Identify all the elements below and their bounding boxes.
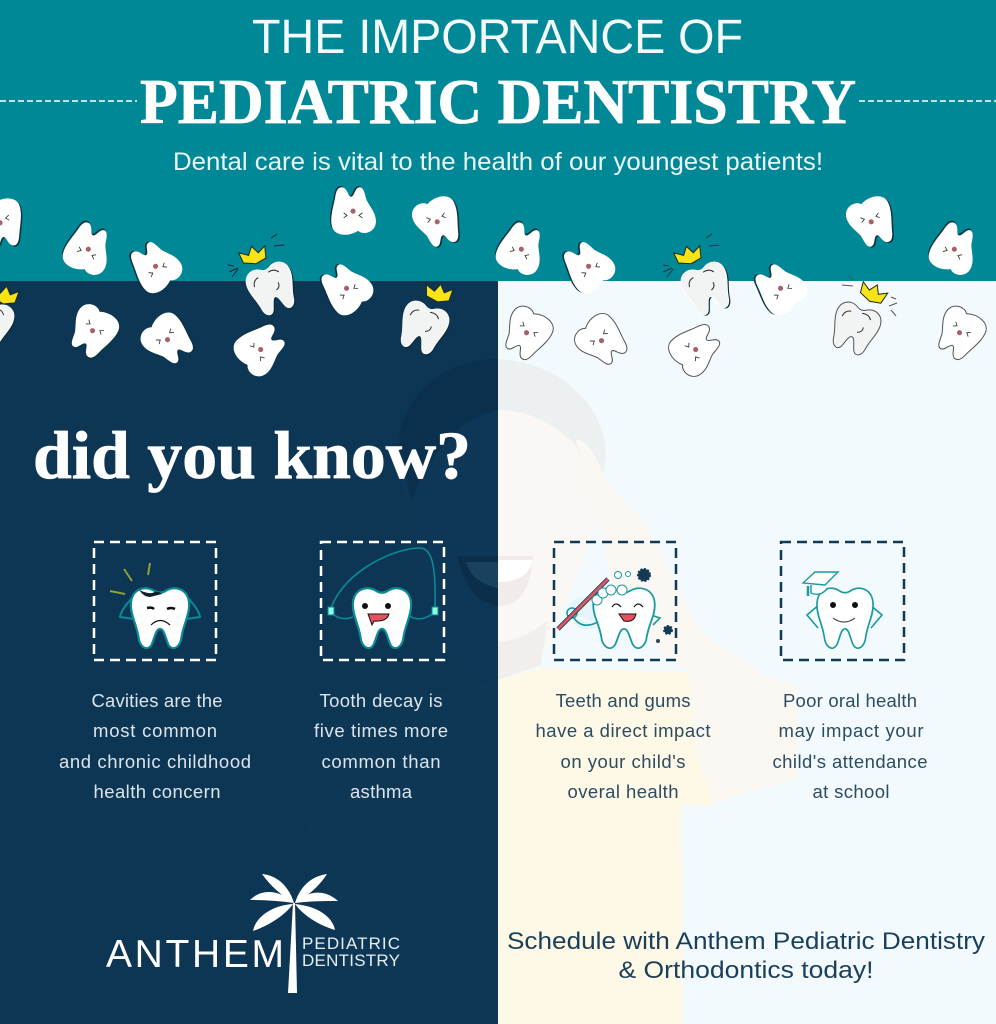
logo: Anthem Pediatric Dentistry: PEDIATRIC: [302, 934, 400, 953]
icon: graduate tooth: [803, 572, 882, 648]
logo: Anthem Pediatric Dentistry: DENTISTRY: [302, 951, 400, 970]
caption: at school: [812, 781, 890, 802]
call to action: [507, 928, 985, 984]
caption: Tooth decay is: [320, 690, 442, 711]
caption: asthma: [350, 781, 413, 802]
title line two: PEDIATRIC DENTISTRY: [140, 66, 856, 137]
caption: on your child's: [560, 751, 686, 772]
fact 2: tooth decay: [314, 542, 448, 802]
caption: and chronic childhood: [59, 751, 251, 772]
logo: Anthem Pediatric Dentistry: [106, 874, 400, 993]
caption: [59, 690, 251, 802]
call to action: & Orthodontics today!: [618, 957, 874, 984]
caption: Teeth and gums: [556, 690, 690, 711]
scattered teeth left: [0, 186, 466, 382]
caption: may impact your: [778, 720, 924, 741]
fact 1: cavities: [59, 542, 251, 802]
caption: five times more: [314, 720, 448, 741]
caption: overal health: [568, 781, 678, 802]
caption: [772, 690, 928, 802]
dashed frame: [781, 542, 904, 660]
caption: common than: [322, 751, 440, 772]
call to action: Schedule with Anthem Pediatric Dentistry: [507, 928, 985, 955]
logo: Anthem Pediatric Dentistry: ANTHEM: [106, 933, 284, 976]
caption: have a direct impact: [536, 720, 710, 741]
child photo overlay: [273, 359, 798, 1024]
icon: tooth with jump rope: [328, 548, 438, 648]
dashed frame: [94, 542, 216, 660]
icon: tooth brushing: [558, 569, 672, 648]
fact 4: oral health: [772, 542, 928, 802]
fact 3: teeth and gums: [536, 542, 710, 802]
heading: did you know: did you know?: [33, 417, 471, 493]
dashed frame: [321, 542, 444, 660]
panel: left navy background: [0, 281, 498, 1024]
caption: [536, 690, 710, 802]
icon: sad tooth with cavity: [110, 563, 200, 648]
caption: health concern: [94, 781, 220, 802]
teal header background: [0, 0, 996, 281]
panel: right light background: [498, 281, 996, 1024]
dashed frame: [554, 542, 676, 660]
dashed rule right: [859, 100, 996, 102]
caption: most common: [93, 720, 217, 741]
icon: palm tree: [250, 874, 338, 993]
caption: Cavities are the: [92, 690, 222, 711]
subtitle: Dental care is vital to the health of our youngest patients!: [173, 148, 823, 176]
scattered teeth right: [491, 193, 991, 382]
title line one: THE IMPORTANCE OF: [252, 11, 743, 64]
caption: [314, 690, 448, 802]
dashed rule left: [0, 100, 137, 102]
caption: Poor oral health: [783, 690, 917, 711]
caption: child's attendance: [772, 751, 928, 772]
